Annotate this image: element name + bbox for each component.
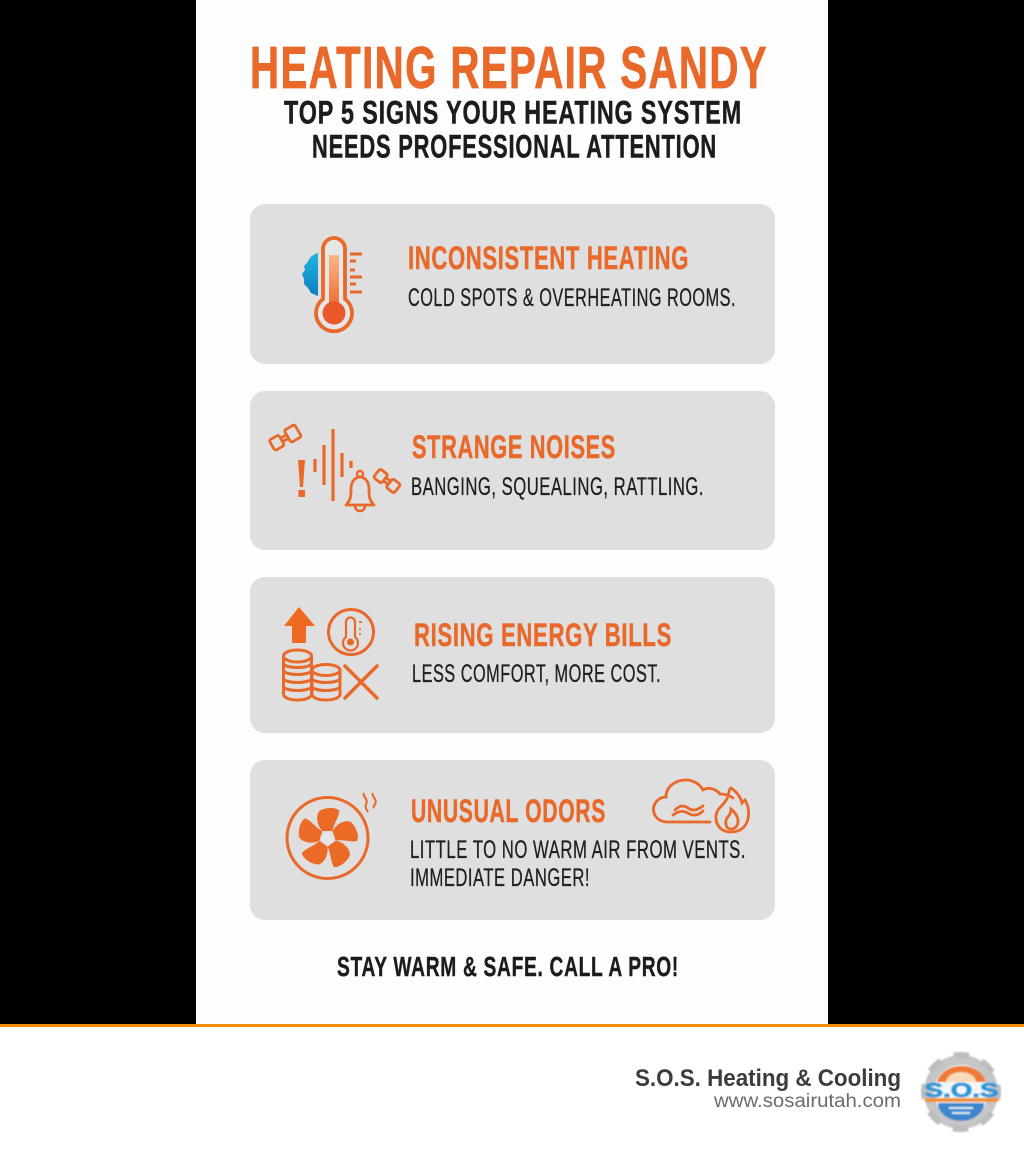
- heading: STRANGE NOISES: [412, 429, 616, 465]
- website: www.sosairutah.com: [713, 1091, 901, 1112]
- heading: UNUSUAL ODORS: [411, 793, 606, 829]
- description: COLD SPOTS & OVERHEATING ROOMS.: [408, 284, 736, 312]
- icon: thermometer: [302, 238, 362, 331]
- description: [410, 836, 746, 892]
- subtitle: NEEDS PROFESSIONAL ATTENTION: [312, 128, 717, 164]
- logo: S.O.S: [924, 1080, 998, 1102]
- panel: unusual odors: [250, 760, 775, 920]
- description: BANGING, SQUEALING, RATTLING.: [411, 473, 704, 501]
- footer: [0, 1024, 1024, 1154]
- panel: strange noises: [250, 391, 775, 550]
- icon: fan: [287, 793, 376, 878]
- icon: noise and bell: [269, 424, 401, 511]
- panel: inconsistent heating: [250, 204, 775, 364]
- description: IMMEDIATE DANGER!: [410, 864, 590, 892]
- description: LITTLE TO NO WARM AIR FROM VENTS.: [410, 836, 746, 864]
- subtitle: [284, 94, 742, 164]
- panel: rising energy bills: [250, 577, 775, 733]
- heading: RISING ENERGY BILLS: [414, 617, 672, 653]
- logo: [924, 1055, 998, 1129]
- icon: coins, arrow, thermometer and cross: [284, 607, 377, 700]
- icon: cloud and flame: [653, 780, 749, 832]
- title: HEATING REPAIR SANDY: [250, 35, 768, 101]
- closing call to action: STAY WARM & SAFE. CALL A PRO!: [337, 951, 679, 982]
- heading: INCONSISTENT HEATING: [408, 240, 689, 276]
- description: LESS COMFORT, MORE COST.: [412, 660, 661, 688]
- subtitle: TOP 5 SIGNS YOUR HEATING SYSTEM: [284, 94, 742, 130]
- company name: S.O.S. Heating & Cooling: [635, 1065, 901, 1092]
